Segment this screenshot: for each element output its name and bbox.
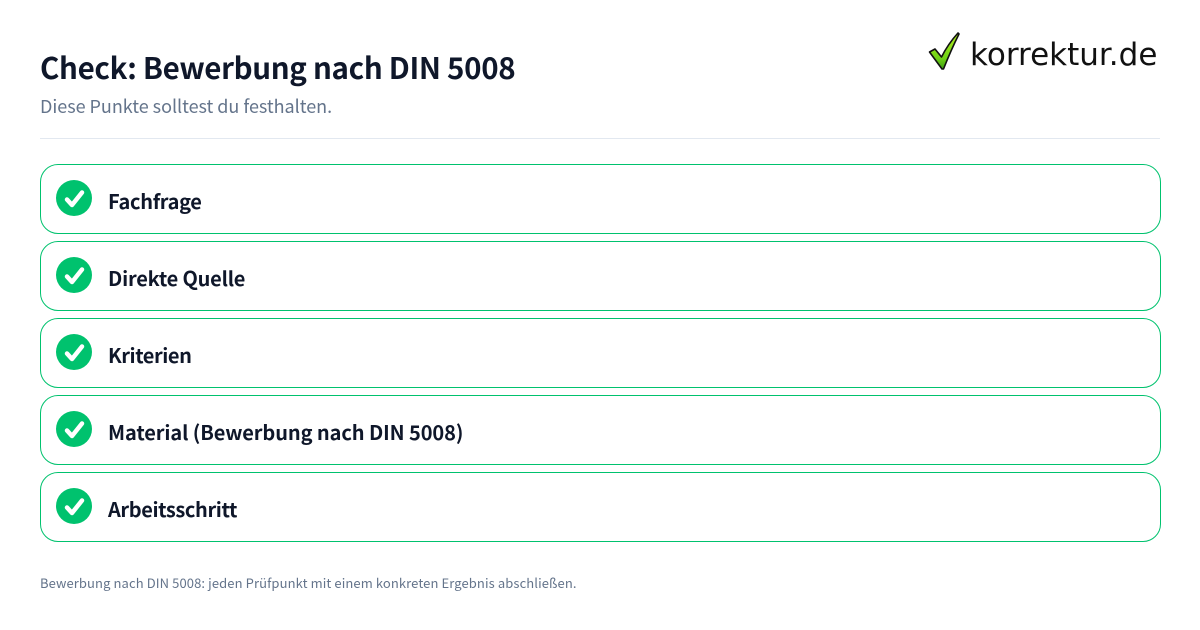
- icon: check: [56, 488, 92, 524]
- label: Kriterien: [108, 340, 191, 369]
- icon: logo check mark: [928, 32, 960, 70]
- panel: Material: [40, 395, 1161, 465]
- panel: Arbeitsschritt: [40, 472, 1161, 542]
- icon: check: [56, 257, 92, 293]
- panel: Fachfrage: [40, 164, 1161, 234]
- label: Arbeitsschritt: [108, 494, 237, 523]
- label: Direkte Quelle: [108, 263, 245, 292]
- icon: check: [56, 334, 92, 370]
- panel: Direkte Quelle: [40, 241, 1161, 311]
- logo wordmark: korrektur.de: [970, 36, 1157, 72]
- title: Check: Bewerbung nach DIN 5008: [40, 46, 515, 88]
- panel: Kriterien: [40, 318, 1161, 388]
- label: Fachfrage: [108, 186, 202, 215]
- label: Material (Bewerbung nach DIN 5008): [108, 417, 463, 446]
- subtitle: Diese Punkte solltest du festhalten.: [40, 93, 332, 119]
- footer note: Bewerbung nach DIN 5008: jeden Prüfpunkt mit einem konkreten Ergebnis abschließen.: [40, 573, 577, 592]
- logo: korrektur.de: [928, 32, 1157, 72]
- icon: check: [56, 411, 92, 447]
- icon: check: [56, 180, 92, 216]
